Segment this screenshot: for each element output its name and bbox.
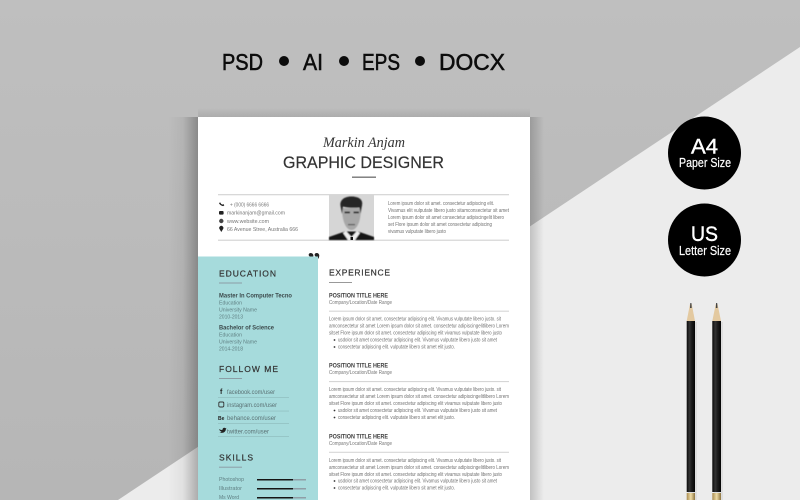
follow me section: facebook.com/user bbox=[227, 389, 275, 396]
job entry 3: Company/Location/Date Range bbox=[329, 441, 392, 447]
format list heading: EPS bbox=[362, 49, 400, 75]
experience section: EXPERIENCE bbox=[329, 268, 390, 278]
job entry 1 bbox=[329, 293, 509, 350]
badge: US letter size bbox=[668, 204, 741, 276]
job entry 2: Company/Location/Date Range bbox=[329, 370, 392, 376]
format list heading: AI bbox=[303, 49, 323, 75]
job entry 2: amconsectetur sit amet Lorem ipsum dolor sit amet. consectetur adipiscingelitlibero Lorem bbox=[329, 394, 509, 400]
job entry 2: sitset Flore ipsum dolor sit amet. consectetur adipiscing elit vivamus vulputate libero justo bbox=[329, 401, 502, 407]
job entry 1: POSITION TITLE HERE bbox=[329, 293, 388, 300]
job entry 1: consectetur adipiscing elit. vulputate libero sit amet elit justo. bbox=[338, 344, 455, 350]
badge: A4 paper size: Paper Size bbox=[679, 155, 731, 170]
pencil left bbox=[687, 303, 697, 500]
job entry 2: Lorem ipsum dolor sit amet. consectetur adipiscing elit. Vivamus vulputate libero justo. sit bbox=[329, 387, 502, 393]
job entry 2: consectetur adipiscing elit. vulputate libero sit amet elit justo. bbox=[338, 415, 455, 421]
job entry 3: POSITION TITLE HERE bbox=[329, 433, 388, 440]
contact details: + (000) 6666 6666 bbox=[230, 202, 269, 208]
skills section bbox=[219, 453, 306, 500]
name: Markin Anjam bbox=[322, 135, 405, 151]
badge: A4 paper size: A4 bbox=[691, 136, 718, 159]
intro paragraph: Lorem ipsum dolor sit amet. consectetur adipiscing elit. bbox=[388, 201, 494, 207]
job entry 3: amconsectetur sit amet Lorem ipsum dolor sit amet. consectetur adipiscingelitlibero Lorem bbox=[329, 465, 509, 471]
education section: Education bbox=[219, 300, 242, 306]
sidebar panel bbox=[198, 256, 318, 500]
skills section: SKILLS bbox=[219, 453, 253, 463]
job entry 3: Lorem ipsum dolor sit amet. consectetur adipiscing elit. Vivamus vulputate libero justo. sit bbox=[329, 458, 502, 464]
intro paragraph: set Flore ipsum dolor sit amet consectetur adipiscing bbox=[388, 222, 492, 228]
contact details bbox=[219, 202, 298, 233]
education section: 2010-2013 bbox=[219, 314, 243, 320]
education section bbox=[219, 269, 292, 352]
job entry 1: sitset Flore ipsum dolor sit amet. consectetur adipiscing elit vivamus vulputate libero justo bbox=[329, 330, 502, 336]
intro paragraph: Vivamus elit vulputate libero justo sitamconsectetur sit amet bbox=[388, 208, 510, 214]
badge: US letter size: Letter Size bbox=[679, 243, 731, 258]
education section: 2014-2018 bbox=[219, 346, 243, 352]
job entry 3 bbox=[329, 433, 509, 491]
education section: Education bbox=[219, 332, 242, 338]
job entry 3: sitset Flore ipsum dolor sit amet. consectetur adipiscing elit vivamus vulputate libero justo bbox=[329, 472, 502, 478]
experience section bbox=[329, 268, 509, 491]
education section: EDUCATION bbox=[219, 269, 276, 279]
job entry 3: usdolor sit amet consectetur adipiscing elit. Vivamus vulputate libero justo sit amet bbox=[338, 478, 498, 484]
job title: GRAPHIC DESIGNER bbox=[283, 153, 444, 172]
follow me section: behance.com/user bbox=[227, 415, 276, 422]
badge: US letter size: US bbox=[691, 223, 718, 246]
intro paragraph: Lorem ipsum dolor sit amet consectetur adipiscingelit libero bbox=[388, 215, 504, 221]
follow me section bbox=[218, 364, 289, 437]
pencil right bbox=[712, 303, 723, 500]
job entry 1: Company/Location/Date Range bbox=[329, 300, 392, 306]
badge: A4 paper size bbox=[668, 116, 741, 190]
contact details: www.website.com bbox=[227, 219, 269, 225]
paper shadow bbox=[168, 108, 544, 500]
contact details: 66 Avenue Stree, Australia 666 bbox=[227, 227, 298, 233]
format list heading: DOCX bbox=[439, 49, 505, 75]
education section: University Name bbox=[219, 340, 257, 346]
job entry 2: POSITION TITLE HERE bbox=[329, 363, 388, 370]
intro paragraph bbox=[388, 201, 510, 235]
resume paper bbox=[198, 117, 530, 500]
job entry 2 bbox=[329, 363, 509, 421]
skills section: Illustrator bbox=[219, 486, 242, 492]
follow me section: Be bbox=[218, 416, 225, 422]
format list heading bbox=[222, 49, 505, 75]
skills section: Photoshop bbox=[219, 477, 244, 483]
education section: Master In Computer Tecno bbox=[219, 292, 292, 300]
education section: Bachelor of Science bbox=[219, 324, 275, 332]
portrait photo bbox=[329, 195, 374, 240]
follow me section: instagram.com/user bbox=[227, 402, 277, 409]
intro paragraph: vivamus vulputate libero justo bbox=[388, 229, 446, 235]
contact details: markinanjam@gmail.com bbox=[227, 211, 285, 217]
job entry 2: usdolor sit amet consectetur adipiscing elit. Vivamus vulputate libero justo sit amet bbox=[338, 408, 498, 414]
job entry 1: amconsectetur sit amet Lorem ipsum dolor sit amet. consectetur adipiscingelitlibero Lorem bbox=[329, 324, 509, 330]
job entry 1: Lorem ipsum dolor sit amet. consectetur adipiscing elit. Vivamus vulputate libero justo. sit bbox=[329, 316, 502, 322]
education section: University Name bbox=[219, 308, 257, 314]
quote mark: ” bbox=[307, 247, 320, 277]
job entry 3: consectetur adipiscing elit. vulputate libero sit amet elit justo. bbox=[338, 485, 455, 491]
follow me section: FOLLOW ME bbox=[219, 364, 278, 374]
job entry 1: usdolor sit amet consectetur adipiscing elit. Vivamus vulputate libero justo sit amet bbox=[338, 338, 498, 344]
format list heading: PSD bbox=[222, 49, 263, 75]
follow me section: f bbox=[220, 389, 223, 396]
follow me section: twitter.com/user bbox=[227, 428, 269, 436]
